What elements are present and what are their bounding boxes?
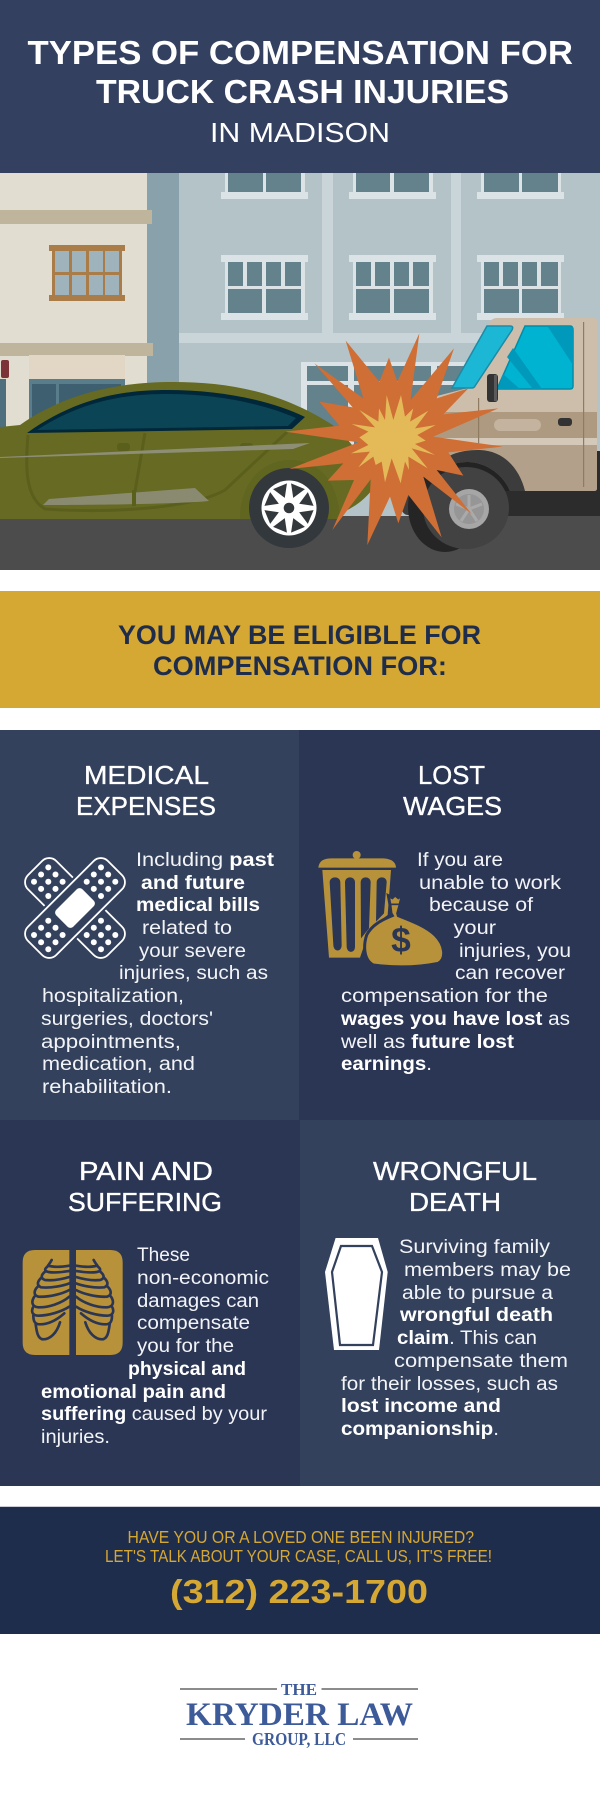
- panel: medical expenses: [0, 730, 299, 1120]
- text: lost wages description: can recover: [455, 963, 566, 984]
- top row windows: [221, 173, 564, 199]
- text: lost wages description: injuries, you: [459, 941, 571, 962]
- panel: wrongful death: [300, 1120, 600, 1486]
- text: pain and suffering description: compensate: [137, 1313, 250, 1334]
- text: lost wages description: [340, 850, 571, 1075]
- text: pain and suffering description: physical and: [128, 1359, 246, 1380]
- text: medical expenses description: and future: [141, 873, 245, 894]
- car window: [27, 390, 305, 433]
- text: medical expenses description: hospitalization,: [42, 986, 184, 1007]
- heading: medical expenses: EXPENSES: [76, 791, 216, 821]
- car: [0, 382, 372, 548]
- text: wrongful death description: claim. This can: [397, 1328, 537, 1349]
- road: [0, 516, 600, 570]
- left building: [0, 173, 179, 427]
- text: lost wages description: because of: [429, 895, 534, 916]
- logo: the kryder law group: KRYDER LAW: [186, 1697, 413, 1733]
- heading: medical expenses: MEDICAL: [84, 760, 209, 790]
- subtitle: IN MADISON: [210, 117, 390, 148]
- lower window: [301, 362, 466, 445]
- call to action text: HAVE YOU OR A LOVED ONE BEEN INJURED?: [128, 1527, 474, 1547]
- text: pain and suffering description: you for the: [137, 1336, 234, 1357]
- heading: lost wages: WAGES: [403, 791, 502, 821]
- text: pain and suffering description: suffering caused by your: [41, 1404, 268, 1425]
- text: lost wages description: wages you have lost as: [340, 1009, 570, 1030]
- text: wrongful death description: for their losses, such as: [341, 1374, 558, 1395]
- icon: trash can with money bag: $: [391, 921, 411, 960]
- logo: the kryder law group: GROUP, LLC: [252, 1729, 346, 1749]
- text: medical expenses description: Including past: [136, 850, 275, 871]
- heading: wrongful death: DEATH: [409, 1187, 501, 1217]
- text: wrongful death description: companionship .: [341, 1419, 499, 1440]
- text: wrongful death description: members may be: [404, 1260, 571, 1281]
- heading: pain and suffering: SUFFERING: [68, 1187, 222, 1217]
- logo: the kryder law group: [180, 1680, 418, 1749]
- banner: eligibility: [0, 591, 600, 708]
- heading: wrongful death: [373, 1156, 537, 1217]
- right building: [179, 173, 564, 462]
- text: wrongful death description: Surviving family: [399, 1237, 551, 1258]
- text: lost wages description: your: [454, 918, 497, 939]
- header panel: [0, 0, 600, 173]
- text: pain and suffering description: emotional pain and: [41, 1382, 226, 1403]
- heading: pain and suffering: [68, 1156, 222, 1217]
- truck mirror: [487, 374, 498, 402]
- text: lost wages description: compensation for the: [341, 986, 548, 1007]
- truck: [402, 318, 600, 552]
- call to action text: LET'S TALK ABOUT YOUR CASE, CALL US, IT'S FREE!: [105, 1546, 492, 1566]
- middle row windows: [221, 255, 564, 320]
- banner: eligibility: YOU MAY BE ELIGIBLE FOR: [118, 620, 481, 650]
- text: medical expenses description: your severe: [139, 941, 246, 962]
- illustration: truck crashing into car on a city street: [0, 173, 600, 570]
- text: pain and suffering description: [41, 1245, 269, 1448]
- text: medical expenses description: rehabilitation.: [42, 1077, 172, 1098]
- text: lost wages description: unable to work: [419, 873, 562, 894]
- text: pain and suffering description: damages can: [137, 1291, 259, 1312]
- call to action text: [105, 1527, 492, 1566]
- icon: crossed bandages: [21, 854, 129, 962]
- icon: trash can with money bag: [318, 851, 444, 967]
- text: pain and suffering description: These: [137, 1245, 190, 1266]
- text: lost wages description: well as future lost: [340, 1032, 515, 1053]
- text: wrongful death description: lost income and: [341, 1396, 501, 1417]
- heading: wrongful death: WRONGFUL: [373, 1156, 537, 1186]
- text: pain and suffering description: injuries.: [41, 1427, 110, 1448]
- text: lost wages description: earnings .: [341, 1054, 432, 1075]
- logo: the kryder law group: THE: [281, 1680, 317, 1699]
- call to action banner: [0, 1506, 600, 1634]
- text: medical expenses description: [41, 850, 275, 1098]
- title: [28, 34, 573, 110]
- title: TYPES OF COMPENSATION FOR: [28, 34, 573, 71]
- icon: coffin: [325, 1238, 388, 1350]
- panel: lost wages: [299, 730, 600, 1120]
- banner: eligibility: COMPENSATION FOR:: [153, 651, 447, 681]
- truck windshield: [452, 326, 513, 388]
- crash burst: [285, 333, 503, 545]
- heading: lost wages: LOST: [418, 760, 485, 790]
- text: medical expenses description: surgeries, doctors': [41, 1009, 213, 1030]
- heading: lost wages: [403, 760, 502, 821]
- phone number: (312) 223-1700: [170, 1573, 428, 1610]
- panel: pain and suffering: [0, 1120, 300, 1486]
- heading: medical expenses: [76, 760, 216, 821]
- text: medical expenses description: medication, and: [42, 1054, 195, 1075]
- text: wrongful death description: wrongful death: [399, 1305, 553, 1326]
- text: wrongful death description: compensate them: [394, 1351, 568, 1372]
- car front wheel: [249, 468, 329, 548]
- text: wrongful death description: able to pursue a: [402, 1283, 553, 1304]
- heading: pain and suffering: PAIN AND: [79, 1156, 213, 1186]
- text: lost wages description: If you are: [417, 850, 503, 871]
- title: TRUCK CRASH INJURIES: [96, 73, 509, 110]
- truck side window: [497, 326, 573, 389]
- text: wrongful death description: [341, 1237, 571, 1440]
- text: medical expenses description: related to: [142, 918, 232, 939]
- text: medical expenses description: appointments,: [41, 1032, 181, 1053]
- text: pain and suffering description: non-economic: [137, 1268, 269, 1289]
- text: medical expenses description: medical bills: [136, 895, 260, 916]
- icon: rib cage: [23, 1250, 123, 1355]
- text: medical expenses description: injuries, such as: [119, 963, 268, 984]
